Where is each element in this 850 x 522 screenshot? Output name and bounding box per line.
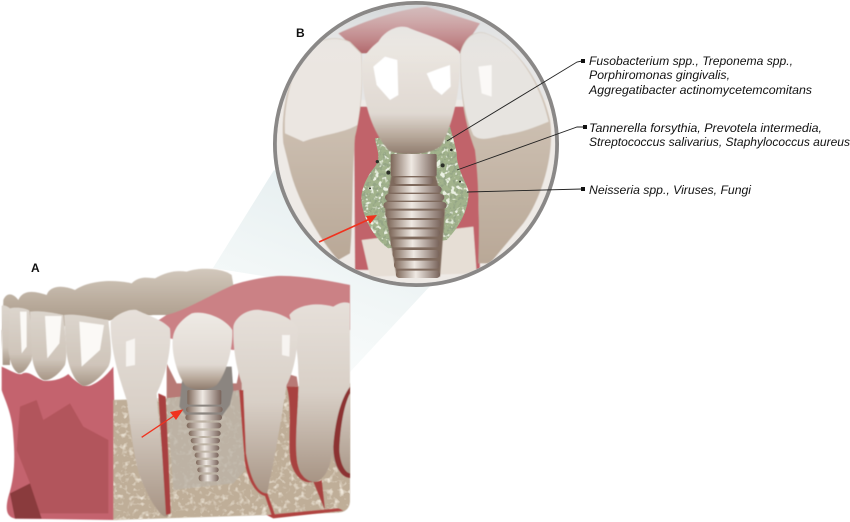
text: group 1 bacteria: Porphiromonas gingivalis, <box>589 70 730 82</box>
implant column <box>385 173 445 277</box>
implant pocket <box>179 367 233 417</box>
magnification beam <box>213 170 432 372</box>
crown B <box>362 27 460 154</box>
lens sheen <box>340 5 482 52</box>
rear upper teeth row <box>2 269 233 350</box>
left tooth <box>283 38 362 260</box>
leader line 2 <box>457 125 587 170</box>
bone <box>113 383 350 520</box>
lens frame <box>275 3 557 285</box>
label A: A <box>31 261 40 275</box>
implant bone block <box>167 390 245 490</box>
label B: B <box>296 26 305 40</box>
far molar tooth <box>289 302 350 482</box>
gum shading <box>17 400 108 513</box>
gum front <box>2 367 117 520</box>
text: group 2 bacteria: Streptococcus salivarius, Staphylococcus aureus <box>589 137 850 149</box>
text: group 1 bacteria: Fusobacterium spp., Treponema spp., <box>589 56 793 68</box>
text: group 3: Neisseria spp., Viruses, Fungi <box>589 185 751 197</box>
panel B: magnified lens <box>273 0 560 287</box>
screw B <box>383 154 447 278</box>
red arrow A <box>142 409 183 437</box>
right tooth <box>460 32 551 263</box>
canine tooth <box>111 310 170 517</box>
implant crown A <box>173 313 232 389</box>
implant screw A <box>185 390 223 481</box>
leader line 3 <box>467 187 585 192</box>
leader line 1 <box>447 59 585 141</box>
lower front incisors <box>2 305 111 386</box>
text: group 2 bacteria <box>589 123 850 149</box>
lens content <box>273 0 560 287</box>
text: group 2 bacteria: Tannerella forsythia, Prevotela intermedia, <box>589 123 822 135</box>
bone base ridge <box>267 508 343 518</box>
text: group 1 bacteria: Aggregatibacter actinomycetemcomitans <box>588 85 812 97</box>
gum pocket <box>354 107 480 270</box>
gum top <box>338 7 480 53</box>
text: group 1 bacteria <box>588 56 812 97</box>
plaque <box>361 126 468 248</box>
bone texture <box>113 383 350 520</box>
molar tooth <box>233 310 298 495</box>
upper background <box>284 5 548 100</box>
bone bottom <box>362 227 477 277</box>
back gum <box>157 276 350 350</box>
plaque specks <box>369 149 461 189</box>
panel A: jaw illustration <box>2 269 350 520</box>
gum around teeth <box>167 360 298 398</box>
red arrow B <box>319 215 377 242</box>
